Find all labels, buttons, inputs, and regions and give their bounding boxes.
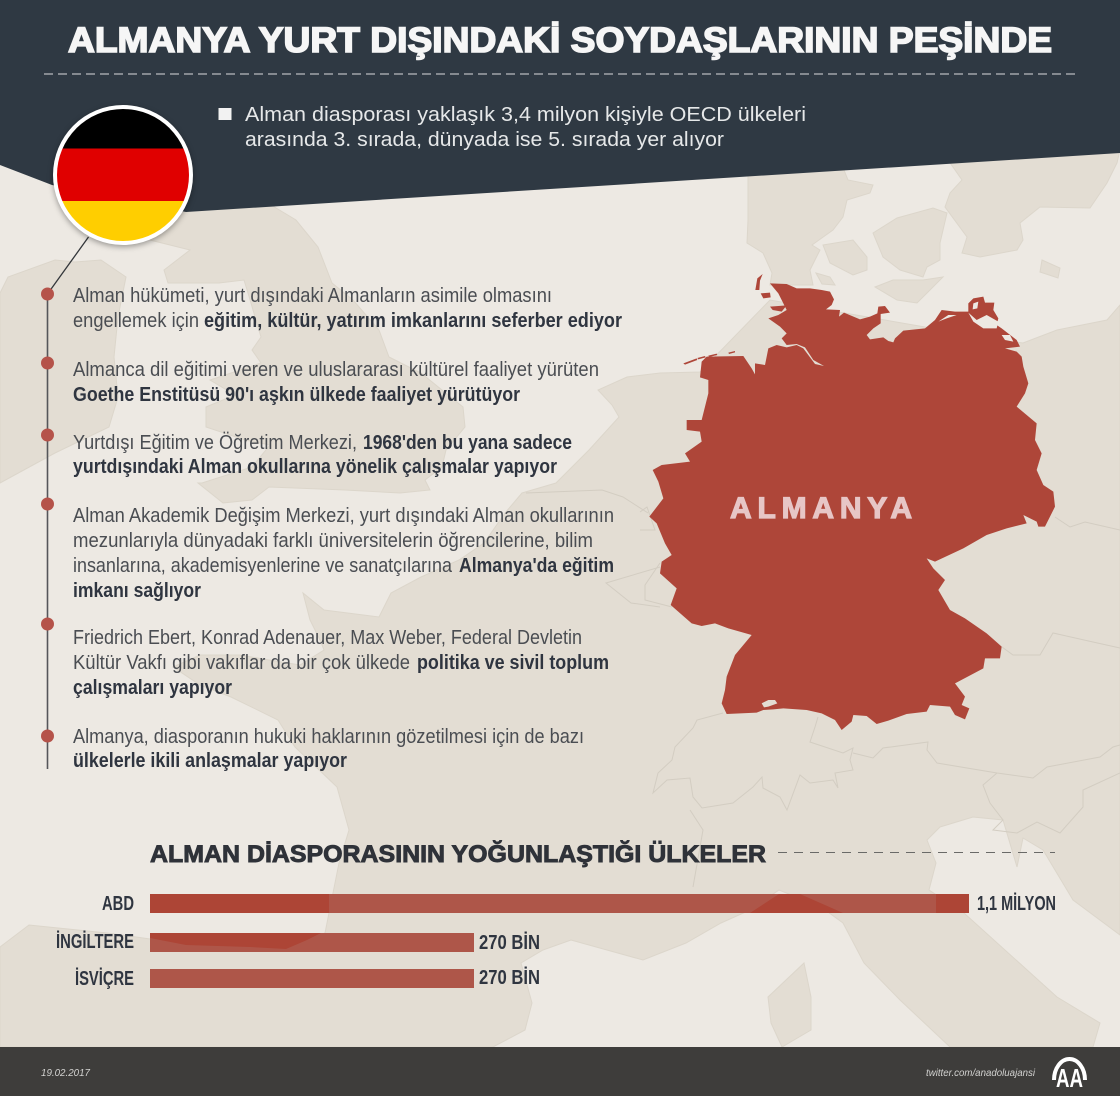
icon: agency logo [1054, 1059, 1085, 1093]
text block 3 [73, 432, 572, 478]
country borders [526, 490, 1120, 887]
source handle: twitter.com/anadoluajansi [926, 1068, 1036, 1079]
header bullet text [218, 104, 806, 151]
text block 6 [73, 726, 584, 772]
text block 5: Kültür Vakfı gibi vakıflar da bir çok ülkede [73, 652, 410, 674]
map: germany [649, 274, 1055, 730]
text block 1: Alman hükümeti, yurt dışındaki Almanların asimile olmasını [73, 285, 552, 307]
text block 2: Goethe Enstitüsü 90'ı aşkın ülkede faaliyet yürütüyor [73, 384, 520, 406]
text block 1: engellemek için [73, 310, 199, 332]
text block 3: Yurtdışı Eğitim ve Öğretim Merkezi, [73, 432, 357, 454]
bar: İsviçre [150, 969, 474, 988]
bar chart [56, 892, 1056, 990]
bar values: 270 BİN [479, 931, 540, 954]
text block 4: Alman Akademik Değişim Merkezi, yurt dışındaki Alman okullarının [73, 505, 614, 527]
text block 4: insanlarına, akademisyenlerine ve sanatçılarına [73, 555, 453, 577]
icon: agency logo: AA [1056, 1063, 1083, 1093]
text block 4: Almanya'da eğitim [459, 555, 614, 577]
text block 3: yurtdışındaki Alman okullarına yönelik çalışmalar yapıyor [73, 456, 557, 478]
text block 2: Almanca dil eğitimi veren ve uluslararası kültürel faaliyet yürüten [73, 359, 599, 381]
text block 4 [73, 505, 614, 602]
text block 5: çalışmaları yapıyor [73, 677, 232, 699]
text block 1 [73, 285, 622, 332]
text block 4: mezunlarıyla dünyadaki farklı üniversitelerin öğrencilerine, bilim [73, 530, 593, 552]
bar labels: İNGİLTERE [56, 930, 134, 953]
bar labels [56, 893, 134, 990]
text block 5: Friedrich Ebert, Konrad Adenauer, Max Weber, Federal Devletin [73, 627, 582, 649]
title: ALMANYA YURT DIŞINDAKİ SOYDAŞLARININ PEŞİNDE [68, 21, 1052, 60]
bar values [479, 892, 1056, 989]
footer [0, 1047, 1120, 1096]
icon: german flag [50, 100, 200, 251]
text block 6: ülkelerle ikili anlaşmalar yapıyor [73, 750, 347, 772]
bar: ABD [150, 894, 969, 913]
text block 1: eğitim, kültür, yatırım imkanlarını seferber ediyor [204, 310, 622, 332]
text block 4: imkanı sağlıyor [73, 580, 201, 602]
bar labels: ABD [102, 893, 134, 915]
timeline connector and dots [41, 237, 88, 769]
map label: ALMANYA [730, 492, 912, 525]
chart title: ALMAN DİASPORASININ YOĞUNLAŞTIĞI ÜLKELER [150, 840, 766, 868]
header bullet text: Alman diasporası yaklaşık 3,4 milyon kişiyle OECD ülkeleri [245, 104, 806, 126]
text block 3: 1968'den bu yana sadece [363, 432, 572, 454]
header bullet text: arasında 3. sırada, dünyada ise 5. sırada yer alıyor [245, 129, 724, 151]
bar values: 270 BİN [479, 966, 540, 989]
bar labels: İSVİÇRE [75, 967, 134, 990]
text block 6: Almanya, diasporanın hukuki haklarının gözetilmesi için de bazı [73, 726, 584, 748]
header band [0, 0, 1120, 212]
bar values: 1,1 MİLYON [977, 892, 1056, 915]
bar: İngiltere [150, 933, 474, 952]
text block 2 [73, 359, 599, 406]
header divider [44, 73, 1075, 75]
text block 5: politika ve sivil toplum [417, 652, 609, 674]
text block 5 [73, 627, 609, 699]
date: 19.02.2017 [41, 1068, 90, 1079]
